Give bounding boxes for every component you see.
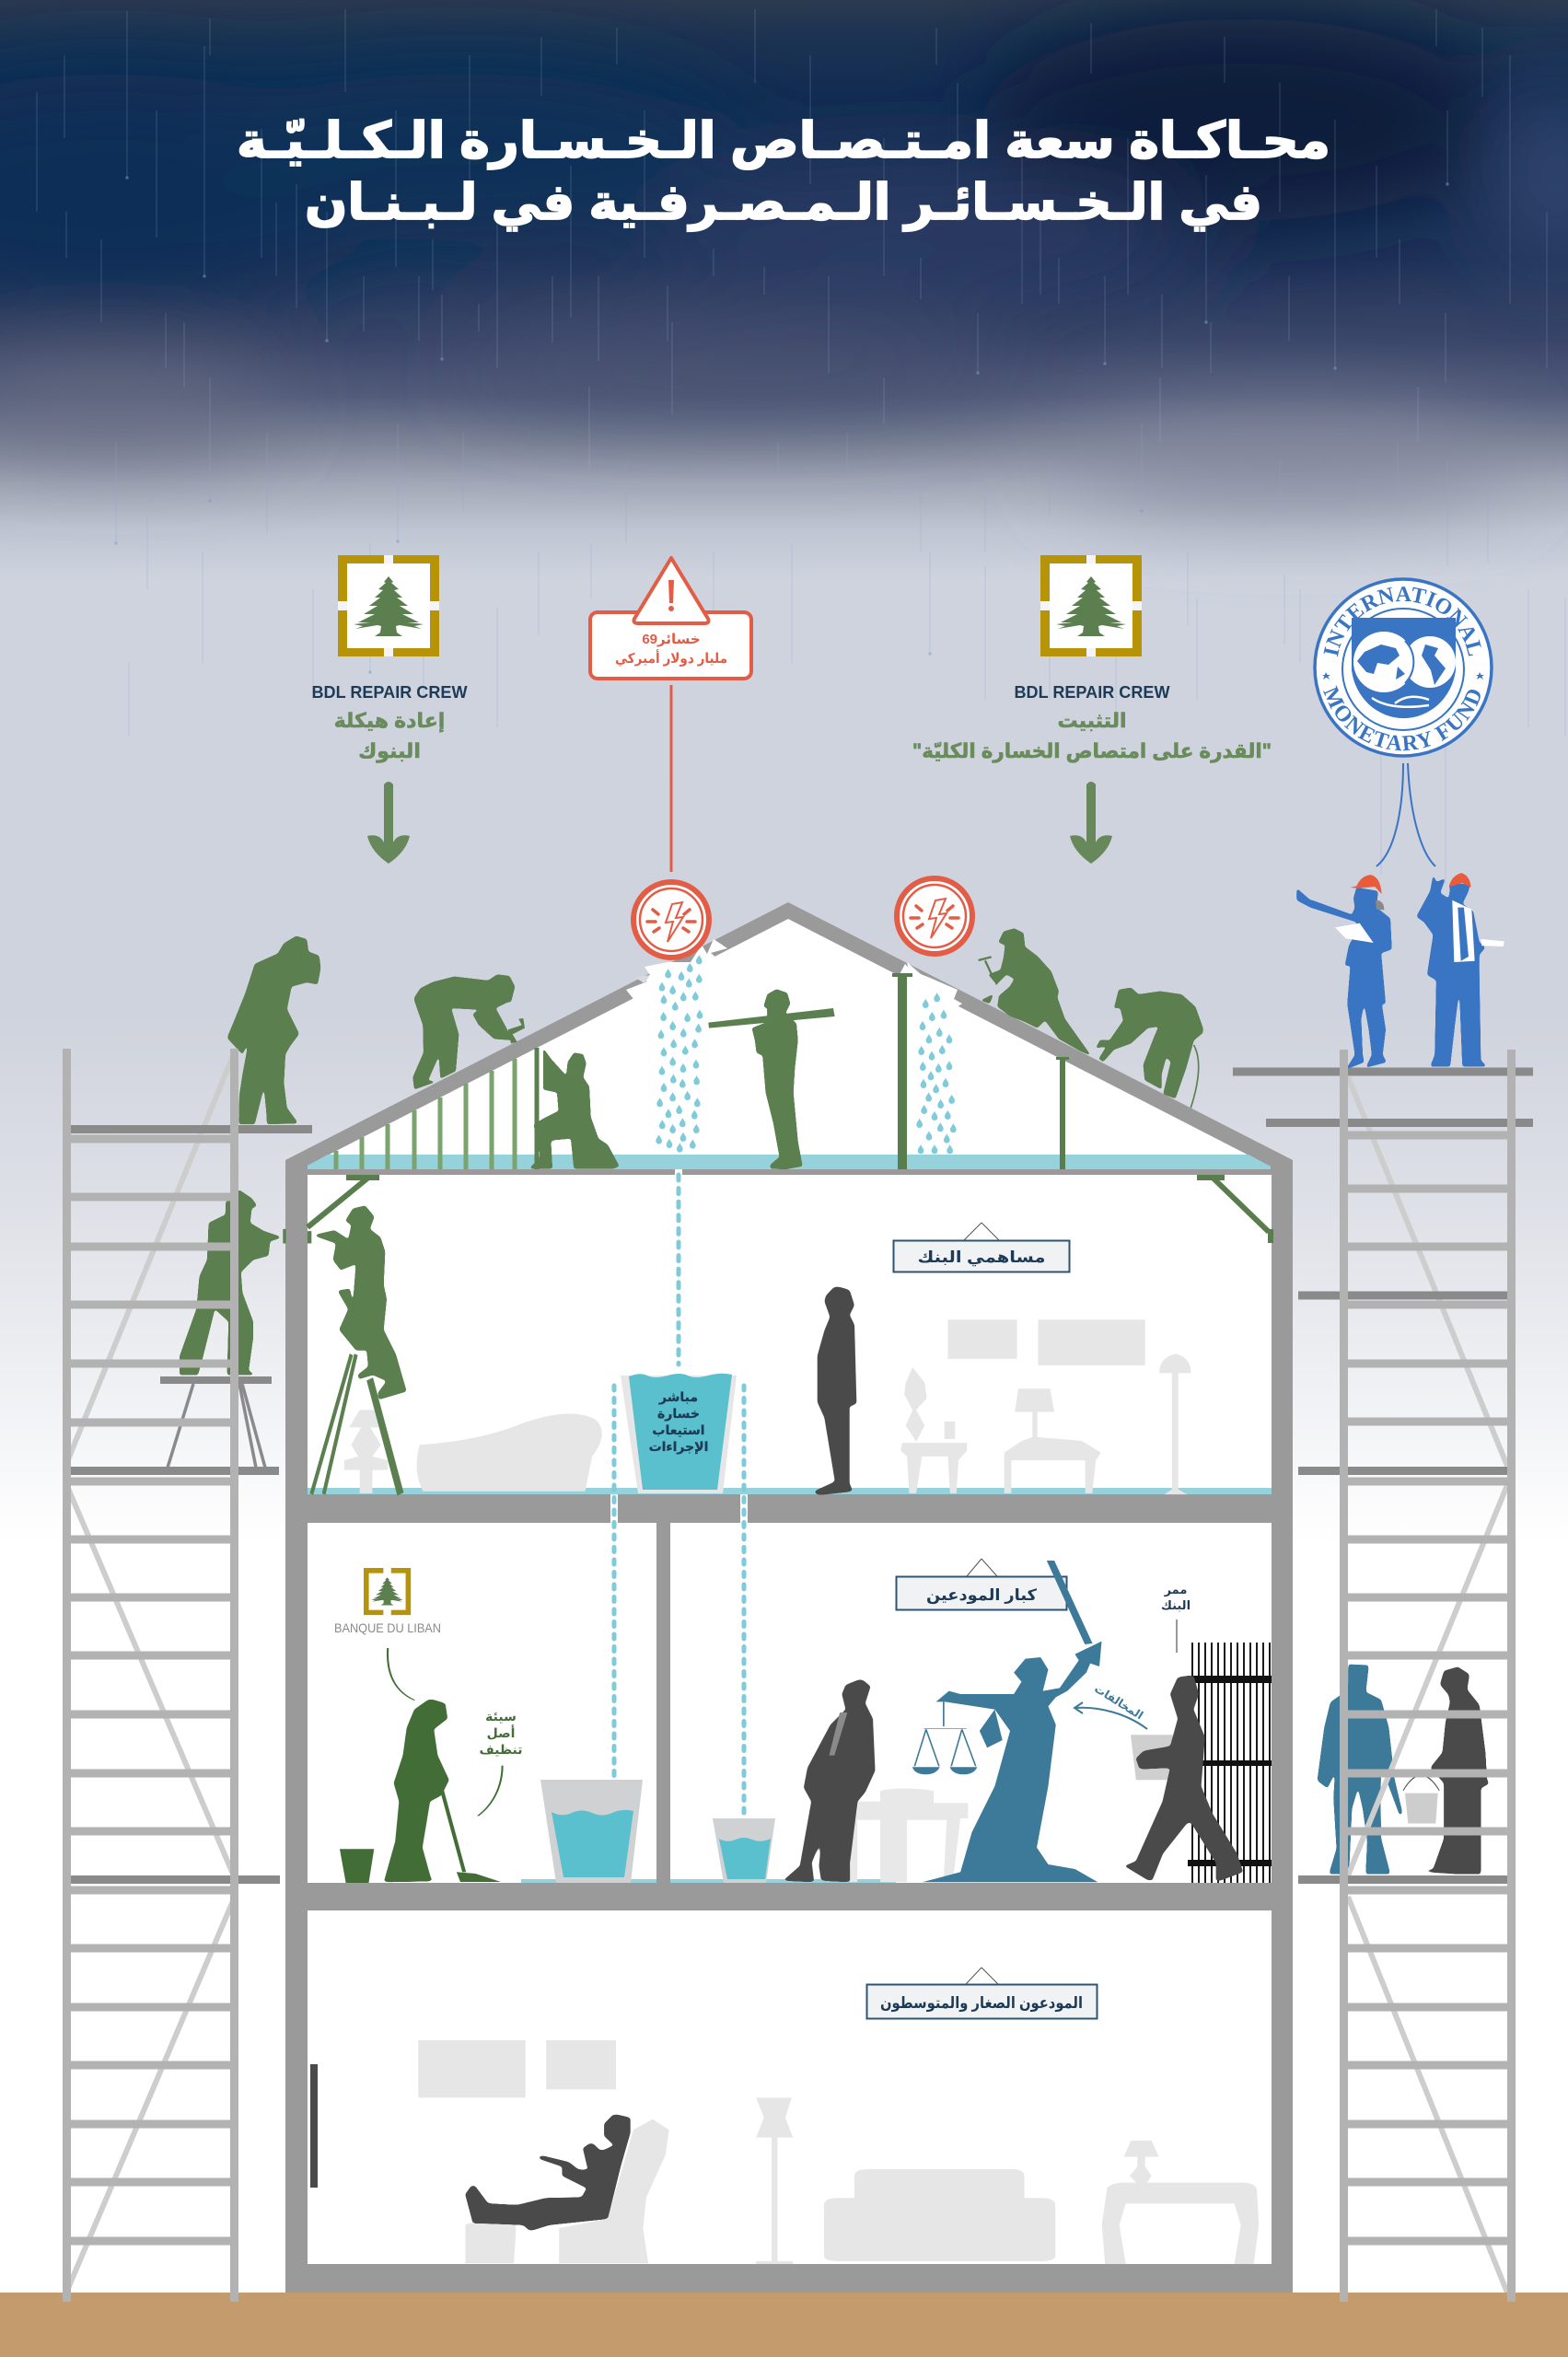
right BDL logo xyxy=(1040,555,1142,656)
IMF man engineer xyxy=(1416,873,1504,1066)
warning sign: 69 billion loss: مليار دولار أميركي xyxy=(615,649,727,667)
left scaffold planks behind worker xyxy=(160,1125,312,1884)
sign: large depositors: كبار المودعين xyxy=(926,1586,1037,1605)
depositor man xyxy=(784,1678,875,1882)
right caption: capacity to absorb total loss: التثبيت xyxy=(1057,709,1127,732)
middle floor left: cleaning woman xyxy=(340,1648,503,1883)
text: bad asset cleanup xyxy=(479,1709,523,1757)
title: محـاكـاة سعة امـتـصـاص الـخـسـارة الـكـلـيّـة xyxy=(237,113,1330,170)
right caption: capacity to absorb total loss xyxy=(912,683,1272,762)
left caption: bank restructuring: إعادة هيكلة xyxy=(334,709,445,733)
water on second floor xyxy=(308,1488,1272,1494)
water drops left leak xyxy=(656,955,703,1153)
water drops right leak xyxy=(916,993,957,1154)
sign: small and medium depositors xyxy=(867,1968,1098,2018)
label: bank passage xyxy=(1161,1583,1191,1653)
sign: small and medium depositors: المودعون الصغار والمتوسطون xyxy=(880,1994,1083,2013)
water drip centre from attic xyxy=(675,1169,682,1364)
left scaffold feet xyxy=(63,2293,238,2302)
guard silhouette xyxy=(1318,1665,1402,1874)
vault bars xyxy=(1188,1643,1272,1883)
sign: large depositors xyxy=(897,1559,1066,1609)
bucket with absorption text: خسارة xyxy=(657,1406,700,1421)
middle floor desk xyxy=(850,1788,968,1882)
rain streaks upper xyxy=(37,9,1547,470)
worker bending with hammer xyxy=(412,974,525,1089)
man relaxing in armchair xyxy=(465,2114,630,2231)
sign: bank shareholders xyxy=(893,1223,1070,1272)
bottom floor furniture xyxy=(418,2040,1259,2264)
text: bad asset cleanup: تنظيف xyxy=(479,1742,523,1757)
text: bad asset cleanup: أصل xyxy=(487,1724,515,1740)
bucket with absorption text: الإجراءات xyxy=(649,1439,708,1455)
knee braces xyxy=(308,1177,1271,1243)
small BDL logo xyxy=(334,1571,441,1635)
worker kneeling with hammer on right roof xyxy=(979,928,1091,1056)
worker on ladder drilling xyxy=(283,1205,407,1399)
roof crack right xyxy=(898,962,962,1013)
ground xyxy=(0,2293,1568,2357)
IMF logo xyxy=(1313,577,1493,758)
bucket with absorption text: استيعاب xyxy=(652,1422,705,1437)
ladder xyxy=(311,1354,401,1494)
furniture second floor xyxy=(344,1319,1191,1494)
impact badge right xyxy=(897,878,972,954)
right scaffold people xyxy=(1318,1665,1490,1874)
title xyxy=(237,113,1330,231)
water on middle floor xyxy=(521,1879,896,1883)
posts xyxy=(892,973,1069,1169)
arrow down right xyxy=(1070,782,1112,864)
worker wiping brow on left platform xyxy=(227,936,320,1124)
right caption: capacity to absorb total loss: BDL REPAIR CREW xyxy=(1015,683,1170,702)
callout lines from IMF logo xyxy=(1376,763,1435,866)
left BDL logo xyxy=(338,555,439,656)
worker drilling on scaffold xyxy=(180,1190,283,1375)
left caption: bank restructuring: البنوك xyxy=(358,739,421,763)
bucket with absorption text: مباشر xyxy=(658,1389,698,1405)
right scaffold feet xyxy=(1340,2293,1516,2302)
roof crack left xyxy=(626,939,727,1013)
IMF logo: INTERNATIONAL xyxy=(1324,586,1481,657)
worker hammering on right roof xyxy=(1096,988,1203,1108)
man stealing bucket at bank passage xyxy=(1124,1675,1243,1882)
warning sign: 69 billion loss xyxy=(590,558,751,872)
right caption: capacity to absorb total loss: "القدرة على امتصاص الخسارة الكليّة" xyxy=(912,739,1272,762)
label: bank passage: البنك xyxy=(1161,1598,1191,1612)
left scaffold xyxy=(63,1049,238,2302)
worker carrying beam xyxy=(708,989,835,1169)
arrow: violations: المخالفات xyxy=(1092,1682,1145,1722)
water on attic floor xyxy=(308,1155,1271,1169)
house structure xyxy=(285,902,1293,2293)
door handle bar xyxy=(310,2064,318,2188)
bucket with absorption text xyxy=(621,1374,737,1493)
IMF woman engineer xyxy=(1296,875,1392,1070)
statue of justice xyxy=(912,1561,1102,1882)
man looking up xyxy=(814,1286,856,1495)
right scaffold xyxy=(1233,1050,1533,2302)
middle floor buckets xyxy=(540,1780,775,1883)
man with bucket silhouette xyxy=(1403,1666,1490,1874)
label: bank passage: ممر xyxy=(1164,1583,1187,1596)
sign: bank shareholders: مساهمي البنك xyxy=(917,1248,1046,1267)
roof studs xyxy=(336,1048,537,1169)
divider wall xyxy=(656,1523,670,1883)
IMF logo: MONETARY FUND xyxy=(1323,685,1481,751)
side drips xyxy=(614,1386,744,1814)
warning sign: 69 billion loss: خسائر69 xyxy=(642,632,701,647)
text: bad asset cleanup: سيئة xyxy=(485,1709,517,1724)
arrow: violations xyxy=(1074,1682,1147,1729)
small BDL logo: BANQUE DU LIBAN xyxy=(334,1620,441,1635)
worker kneeling xyxy=(529,1048,620,1168)
title: في الـخـسـائـر الـمـصـرفـية في لـبـنـان xyxy=(305,175,1262,231)
left caption: bank restructuring xyxy=(311,683,468,763)
arrow down left xyxy=(367,782,410,864)
left caption: bank restructuring: BDL REPAIR CREW xyxy=(311,683,468,702)
impact badge left xyxy=(633,882,709,958)
